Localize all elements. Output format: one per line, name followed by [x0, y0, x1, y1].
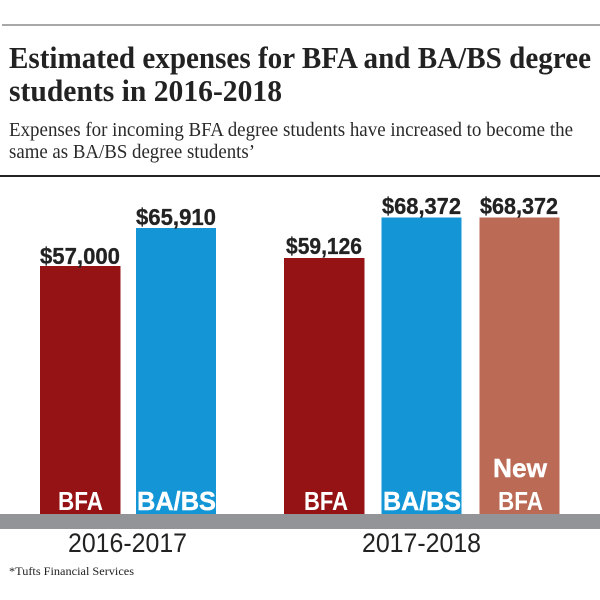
- bar: BA/BS 2017-2018: BA/BS: [383, 486, 461, 516]
- bar: BA/BS 2016-2017: [136, 204, 216, 516]
- axis label: 2016-2017: 2016-2017: [68, 528, 187, 558]
- bar: New BFA 2017-2018: [480, 193, 560, 516]
- footnote: *Tufts Financial Services: [9, 564, 134, 578]
- bar: BFA 2017-2018: BFA: [304, 486, 348, 516]
- bar: BA/BS 2016-2017: $65,910: [136, 204, 216, 230]
- bar: BFA 2017-2018: $59,126: [286, 233, 362, 259]
- bar: New BFA 2017-2018: New: [493, 453, 548, 483]
- bar: New BFA 2017-2018: BFA: [498, 486, 543, 516]
- group: 2017-2018: [284, 193, 560, 558]
- title: [9, 40, 591, 108]
- bar: BFA 2016-2017: $57,000: [40, 243, 120, 269]
- subtitle: Expenses for incoming BFA degree students have increased to become the: [9, 119, 573, 141]
- bar chart: [0, 193, 600, 558]
- axis label: 2017-2018: 2017-2018: [362, 528, 481, 558]
- bar: BA/BS 2017-2018: [382, 193, 462, 516]
- title: students in 2016-2018: [9, 73, 282, 108]
- bar: New BFA 2017-2018: $68,372: [480, 193, 558, 219]
- axis baseline band: [0, 514, 600, 529]
- subtitle: same as BA/BS degree students’: [9, 141, 255, 163]
- bar: BFA 2017-2018: [284, 233, 364, 516]
- bar: BA/BS 2016-2017: BA/BS: [137, 486, 216, 516]
- bar: BFA 2016-2017: [40, 243, 120, 516]
- bar: BFA 2016-2017: BFA: [58, 486, 103, 516]
- group: 2016-2017: [40, 204, 216, 558]
- bar: BA/BS 2017-2018: $68,372: [382, 193, 461, 219]
- subtitle: [9, 119, 573, 163]
